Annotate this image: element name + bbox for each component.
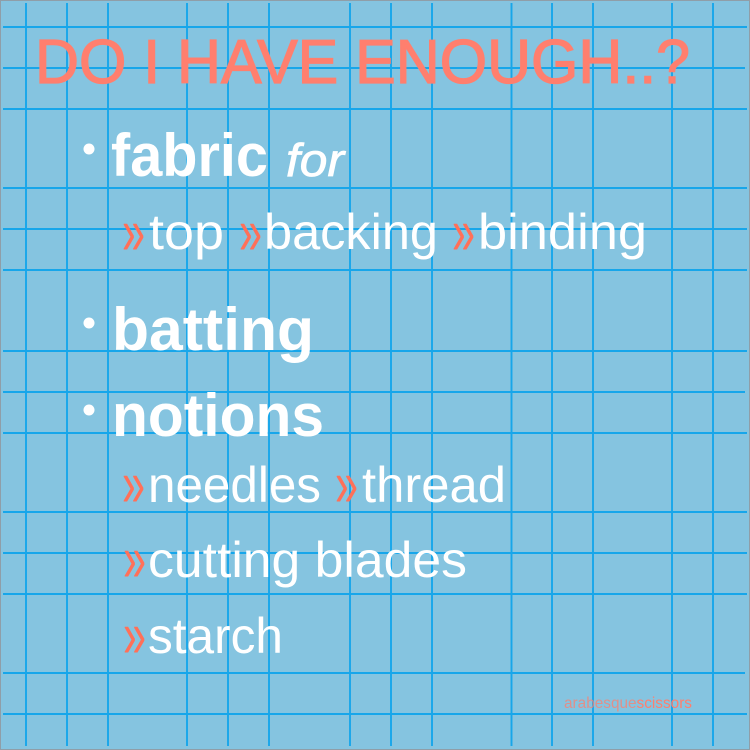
brand credit: arabesquescissors — [564, 695, 692, 712]
chevron: needles: » — [122, 446, 145, 520]
title: DO I HAVE ENOUGH..? — [35, 28, 690, 97]
chevron: binding: » — [452, 194, 475, 268]
heading: fabric: fabric — [111, 122, 268, 189]
section: batting — [84, 296, 314, 363]
item: needles: needles — [148, 457, 321, 513]
item: cutting blades: cutting blades — [148, 532, 467, 588]
heading: notions: notions — [112, 382, 324, 449]
bullet: notions — [84, 404, 94, 416]
item: top: top — [149, 204, 224, 260]
bullet: fabric — [84, 144, 94, 154]
chevron: backing: » — [239, 194, 262, 268]
section: fabric — [84, 122, 647, 268]
item: thread: thread — [362, 457, 506, 513]
chevron: top: » — [122, 194, 145, 268]
heading: batting: batting — [112, 296, 314, 363]
chevron: starch: » — [123, 597, 146, 671]
item: starch: starch — [148, 608, 283, 664]
bullet: batting — [84, 318, 94, 328]
chevron: thread: » — [335, 446, 358, 520]
item: backing: backing — [264, 204, 438, 260]
label: for: for — [286, 134, 346, 186]
item: binding: binding — [478, 204, 647, 260]
section: notions — [84, 382, 506, 671]
chevron: cutting blades: » — [123, 521, 146, 595]
